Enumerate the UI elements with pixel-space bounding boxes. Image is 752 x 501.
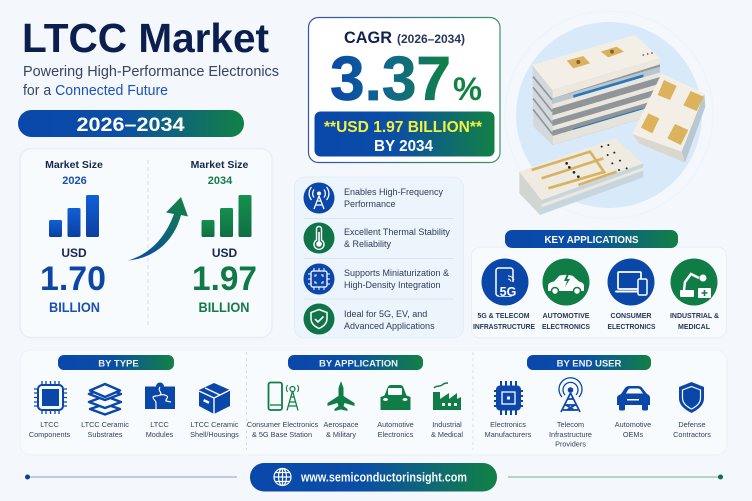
icon: defense shield [679, 382, 704, 413]
by type labels: Substrates [88, 430, 123, 439]
period pill: 2026–2034 [76, 114, 185, 136]
panel: CAGR: % [453, 71, 482, 107]
application: industrial [670, 258, 718, 306]
benefit text: thermal: & Reliability [344, 239, 392, 249]
by end user labels [485, 420, 711, 448]
benefit text: thermal: Excellent Thermal Stability [344, 227, 450, 237]
benefit text: miniaturization: Supports Miniaturization & [344, 268, 449, 278]
by type labels: LTCC [150, 420, 169, 429]
application labels: ELECTRONICS [542, 324, 590, 331]
by type heading: BY TYPE [98, 358, 139, 370]
by application labels: Industrial [432, 420, 462, 429]
subtitle [23, 63, 279, 99]
application: automotive [542, 258, 590, 306]
market size 2034: 2034 [208, 175, 233, 187]
by end user labels: Providers [555, 440, 586, 448]
by end user heading: BY END USER [557, 358, 622, 370]
by type labels: Shell/Housings [190, 430, 239, 439]
market size 2034 [191, 159, 257, 315]
market size 2026: BILLION [49, 299, 100, 315]
benefit text: applications: Advanced Applications [344, 321, 435, 331]
by end user labels: Manufacturers [485, 430, 532, 439]
by type labels [29, 420, 239, 439]
icon: electronics chip [494, 381, 523, 415]
by end user labels: Infrastructure [549, 430, 592, 439]
panel: benefits [294, 177, 464, 338]
by application heading: BY APPLICATION [319, 358, 398, 370]
panel: market size [20, 148, 272, 338]
market size 2026: 1.70 [40, 260, 106, 298]
market size 2034: BILLION [198, 299, 250, 315]
benefit text: applications: Ideal for 5G, EV, and [344, 309, 427, 319]
by application labels: & Medical [431, 430, 463, 439]
footer line left [25, 474, 237, 480]
application labels: ELECTRONICS [608, 324, 656, 331]
by type labels: LTCC [40, 420, 59, 429]
icon: factory [433, 383, 461, 410]
by type [29, 355, 239, 439]
application labels: INFRASTRUCTURE [473, 324, 535, 331]
icon: telecom tower [559, 378, 582, 412]
market size 2034: Market Size [191, 159, 249, 171]
website pill: www.semiconductorinsight.com [300, 470, 467, 484]
market size 2026: USD [61, 246, 87, 260]
period pill [18, 110, 244, 137]
forecast callout: BY 2034 [374, 138, 433, 155]
icon: LTCC component chip [34, 381, 67, 414]
by application labels: Electronics [378, 430, 414, 439]
market size 2026: 2026 [62, 175, 87, 187]
icon: OEM car [617, 386, 650, 410]
icon: signal tower [304, 182, 334, 214]
key applications heading: KEY APPLICATIONS [544, 234, 638, 246]
by application labels [247, 420, 463, 439]
by application heading [288, 355, 423, 370]
subtitle: Powering High-Performance Electronics [23, 63, 279, 80]
market size 2026 [40, 159, 106, 315]
application labels: AUTOMOTIVE [542, 313, 590, 320]
icon: shield check [304, 304, 334, 334]
subtitle: for a Connected Future [23, 82, 168, 99]
icon: puzzle module [145, 382, 175, 409]
benefit text: high frequency: Performance [344, 199, 396, 209]
benefit text: high frequency: Enables High-Frequency [344, 187, 444, 197]
by type labels: Modules [146, 430, 174, 439]
illustration: LTCC components [505, 11, 713, 219]
chip with gold pads [632, 73, 705, 163]
icon: aircraft [328, 381, 354, 411]
panel: CAGR: (2026–2034) [397, 34, 465, 46]
application: consumer [608, 258, 654, 306]
by application labels: Aerospace [324, 420, 358, 429]
by end user labels: Automotive [615, 420, 651, 429]
panel: CAGR [308, 18, 500, 162]
market size 2034: USD [212, 246, 237, 260]
title: LTCC Market [22, 15, 269, 61]
application: 5G: 5G [500, 285, 516, 299]
icon: ceramic substrate layers [89, 384, 121, 414]
forecast callout [314, 112, 494, 156]
benefit text: miniaturization: High-Density Integration [344, 280, 441, 290]
by type heading [58, 355, 174, 370]
by application labels: Consumer Electronics [247, 420, 319, 429]
CAGR heading: CAGR [344, 28, 392, 47]
icon: automotive car [380, 385, 410, 410]
footer line right [508, 474, 723, 480]
market size 2034: 1.97 [192, 260, 257, 298]
panel: key applications [472, 230, 726, 338]
website pill [250, 463, 497, 492]
application: 5G [482, 258, 528, 306]
by end user labels: OEMs [623, 430, 643, 439]
application labels: INDUSTRIAL & [670, 313, 719, 320]
by application labels: & Military [326, 430, 356, 439]
CAGR value: 3.37 [330, 45, 451, 114]
icon: phone and base station [268, 382, 299, 410]
by type labels: LTCC Ceramic [191, 420, 239, 429]
by end user labels: Telecom [557, 420, 584, 429]
by type labels: Components [29, 430, 71, 439]
by type labels: LTCC Ceramic [81, 420, 129, 429]
by end user labels: Electronics [490, 420, 526, 429]
by application [247, 355, 463, 439]
application labels: CONSUMER [610, 313, 652, 320]
by application labels: Automotive [377, 420, 414, 429]
panel: segmentation [20, 350, 727, 455]
application labels [473, 313, 719, 331]
forecast callout: **USD 1.97 BILLION** [324, 119, 483, 136]
stacked module [532, 35, 660, 145]
by end user labels: Contractors [673, 430, 711, 439]
icon: ceramic housing box [199, 383, 230, 414]
market size 2026: Market Size [45, 159, 103, 171]
growth arrow [128, 197, 188, 260]
by end user [485, 355, 711, 448]
application labels: MEDICAL [678, 324, 711, 331]
by end user heading [527, 355, 651, 370]
icon: globe [274, 468, 291, 486]
icon: thermometer [304, 222, 334, 254]
icon: microchip [304, 264, 334, 294]
by application labels: & 5G Base Station [252, 430, 312, 439]
by end user labels: Defense [678, 420, 706, 429]
key applications heading [505, 230, 678, 248]
application labels: 5G & TELECOM [478, 313, 530, 320]
gold trace plate [519, 138, 643, 215]
